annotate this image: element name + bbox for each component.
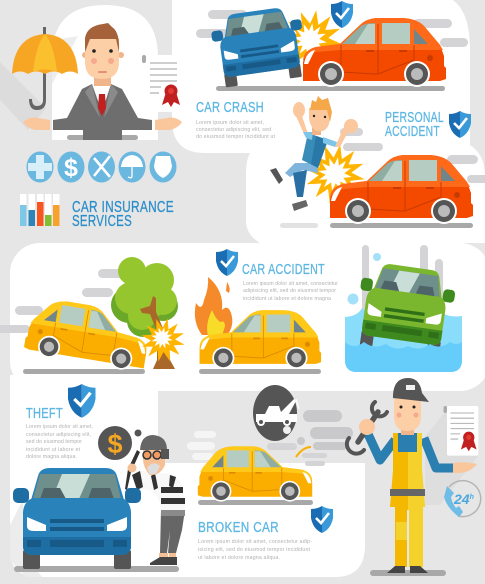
certificate — [142, 55, 182, 112]
text: theft: Lorem ipsum dolor sit amet, — [26, 424, 93, 430]
speed lines: personal — [280, 128, 485, 228]
shadow: theft car — [10, 500, 42, 577]
road: fire car — [199, 369, 321, 374]
text: broken car: Lorem ipsum dolor sit amet, consectetur adip- — [198, 539, 312, 545]
icon: tow truck — [253, 385, 299, 441]
smoke — [267, 410, 353, 466]
heading: car crash: CAR CRASH — [196, 99, 264, 116]
shield: broken — [311, 506, 333, 533]
smoke: white — [187, 431, 216, 460]
text: car crash: consectetur adipiscing elit, sed — [196, 127, 271, 133]
icon row: services: $ — [64, 154, 78, 182]
shadow: umbrella — [0, 62, 46, 130]
figure: thief — [125, 435, 185, 565]
road: broken car — [198, 500, 313, 505]
panel: theft — [10, 375, 365, 577]
bar chart — [20, 194, 60, 226]
car: red crash — [303, 18, 446, 87]
car: blue theft — [13, 468, 141, 569]
text: car accident: Lorem ipsum dolor sit amet, consectetur — [243, 281, 338, 287]
panel: broken car — [158, 465, 365, 575]
text: theft: consectetur adipiscing elit, — [26, 432, 91, 438]
text: car crash — [196, 120, 276, 140]
icon: 24h: 24 — [454, 491, 470, 507]
text: car accident: incididunt ut labore et dolore magna — [243, 296, 331, 302]
panel: man backdrop — [52, 5, 158, 140]
title: SERVICES — [72, 213, 132, 230]
icon: dollar bubble: $ — [107, 429, 123, 459]
car: yellow broken — [198, 446, 312, 502]
certificate: mechanic — [444, 406, 478, 456]
panel: car crash — [172, 0, 485, 243]
heading: personal accident — [385, 109, 444, 140]
text: car accident — [243, 281, 338, 302]
shield: crash — [331, 1, 353, 28]
text: car crash: do eiusmod tempor incididunt ut — [196, 134, 276, 140]
heading: car accident: CAR ACCIDENT — [242, 261, 325, 278]
heading: personal accident: ACCIDENT — [385, 123, 440, 140]
panel: car accident — [10, 243, 485, 391]
shadow: man backdrop — [52, 36, 78, 84]
text: broken car: ut labore et dolore magna aliqua. — [198, 555, 280, 561]
icon: 24h — [444, 481, 481, 517]
text: broken car: isicing elit, sed do eiusmod tempor incididunt — [198, 547, 311, 553]
text: car accident: adipisicing elit, sed do eiusmod tempor — [243, 288, 336, 294]
shadow: mechanic — [425, 410, 478, 505]
explosion: tree — [137, 314, 189, 366]
speed lines: accident — [0, 269, 127, 333]
heading: personal accident: PERSONAL — [385, 109, 444, 126]
icon row: services — [26, 152, 176, 182]
figure: mechanic — [347, 378, 477, 576]
shield: theft — [68, 384, 96, 418]
flood scene — [345, 245, 462, 372]
road: personal — [330, 223, 473, 228]
car: blue crash — [209, 5, 309, 88]
heading: theft: THEFT — [26, 405, 63, 422]
text: theft — [26, 424, 93, 460]
text: theft: dolore magna aliqua. — [26, 454, 77, 460]
car: yellow tree crash — [23, 296, 152, 373]
icon: dollar bubble — [98, 426, 142, 460]
road: crash — [216, 86, 445, 91]
text: broken car — [198, 539, 312, 561]
road: tree car — [23, 369, 145, 374]
fire — [195, 277, 232, 336]
figure: falling man — [270, 96, 358, 211]
text: theft: incididunt ut labore et — [26, 447, 81, 453]
shield: accident — [216, 249, 238, 276]
text: car crash: Lorem ipsum dolor sit amet, — [196, 120, 264, 126]
figure: businessman — [23, 23, 182, 140]
explosion: crash — [278, 6, 346, 74]
car: red personal — [330, 155, 473, 224]
icon: 24h: h — [470, 494, 474, 501]
title: CAR INSURANCE — [72, 199, 174, 216]
title — [72, 199, 174, 230]
icon: umbrella — [12, 27, 78, 110]
shield: personal — [449, 111, 471, 138]
car: yellow fire — [200, 310, 321, 369]
speed lines: crash — [196, 10, 468, 47]
text: theft: sed do eiusmod tempor — [26, 439, 82, 445]
tree — [111, 257, 178, 369]
road: theft — [14, 566, 179, 572]
explosion: personal — [300, 139, 370, 209]
heading: broken car: BROKEN CAR — [198, 519, 279, 536]
